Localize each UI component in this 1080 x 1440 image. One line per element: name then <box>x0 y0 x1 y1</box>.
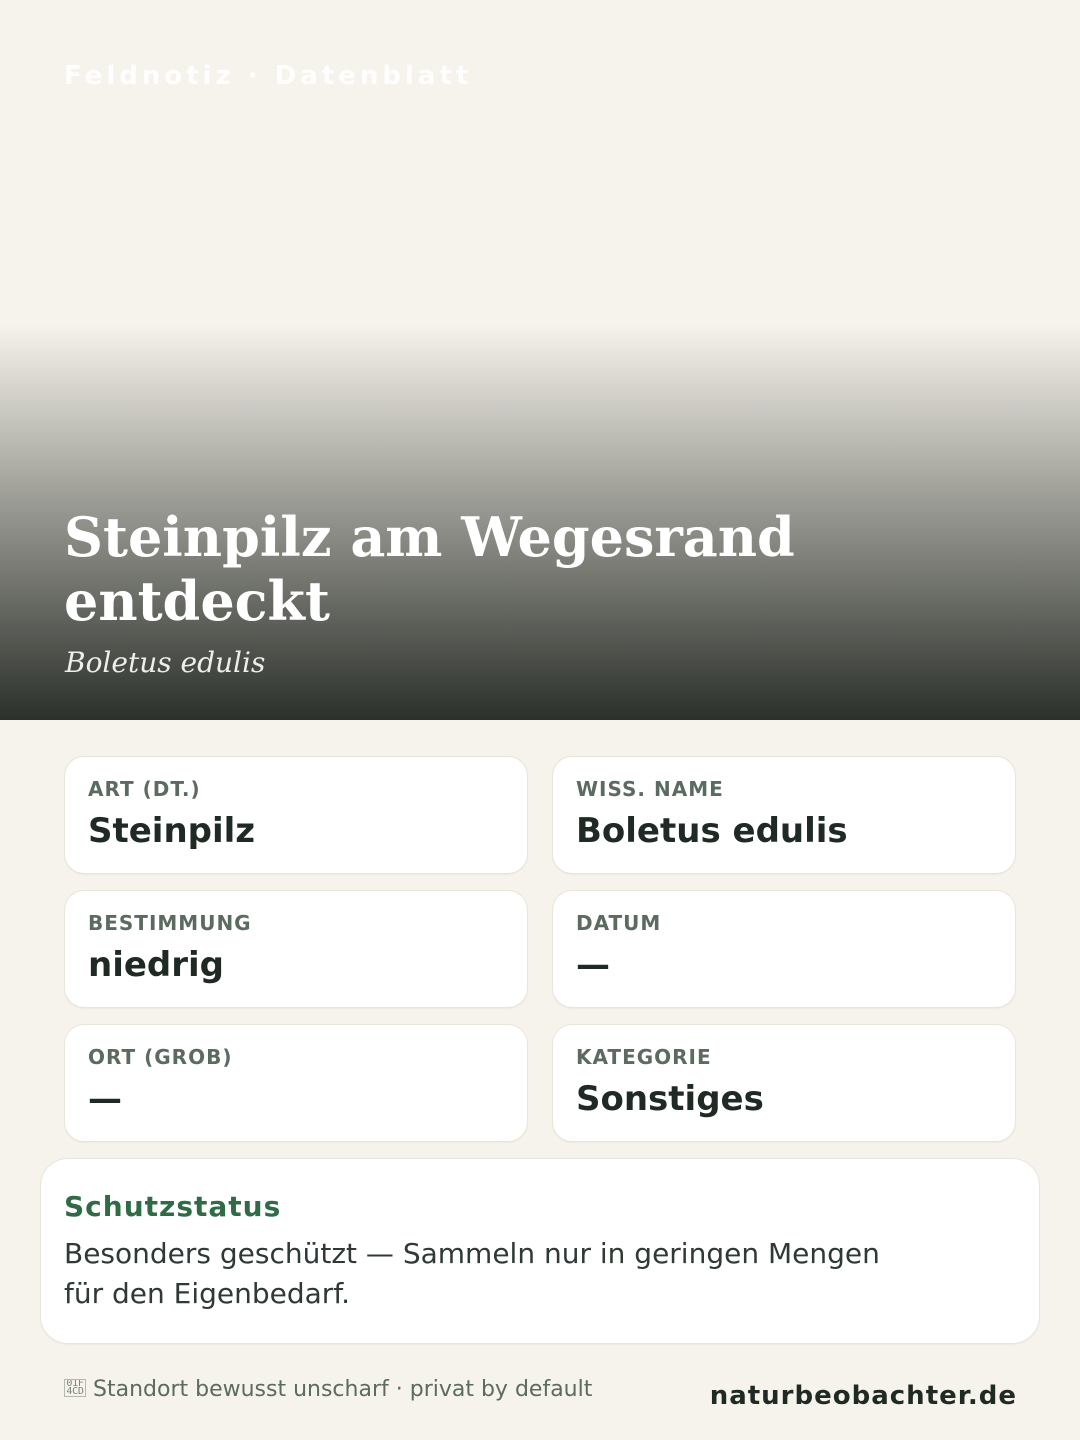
label: KATEGORIE <box>576 1045 712 1069</box>
label: ART (DT.) <box>88 777 201 801</box>
value: — <box>576 945 610 985</box>
panel heading: Schutzstatus <box>64 1190 281 1223</box>
scientific name subtitle: Boletus edulis <box>65 646 265 679</box>
value: Sonstiges <box>576 1079 764 1119</box>
protection text: Besonders geschützt — Sammeln nur in geringen Mengen <box>64 1237 880 1270</box>
label: ORT (GROB) <box>88 1045 232 1069</box>
value: — <box>88 1079 122 1119</box>
label: BESTIMMUNG <box>88 911 252 935</box>
icon: missing-glyph box <box>64 1379 86 1397</box>
value: Steinpilz <box>88 811 255 851</box>
title: Steinpilz am Wegesrand <box>64 505 795 569</box>
value: Boletus edulis <box>576 811 848 851</box>
panel: Schutzstatus <box>40 1158 1040 1344</box>
footer note: Standort bewusst unscharf · privat by default <box>93 1377 592 1402</box>
icon: missing-glyph box: 4CD <box>66 1386 84 1397</box>
label: DATUM <box>576 911 661 935</box>
data card: Kategorie <box>552 1024 1016 1142</box>
data card: wissenschaftlicher Name <box>552 756 1016 874</box>
value: niedrig <box>88 945 224 985</box>
protection text <box>64 1237 880 1310</box>
data card: Art <box>64 756 528 874</box>
data card: Datum <box>552 890 1016 1008</box>
hero panel <box>0 0 1080 720</box>
data card: Ort <box>64 1024 528 1142</box>
eyebrow label: Feldnotiz · Datenblatt <box>64 61 472 91</box>
title <box>64 505 795 633</box>
title: entdeckt <box>64 569 330 633</box>
protection text: für den Eigenbedarf. <box>64 1277 350 1310</box>
label: WISS. NAME <box>576 777 724 801</box>
footer brand: naturbeobachter.de <box>710 1381 1017 1411</box>
data card: Bestimmung <box>64 890 528 1008</box>
